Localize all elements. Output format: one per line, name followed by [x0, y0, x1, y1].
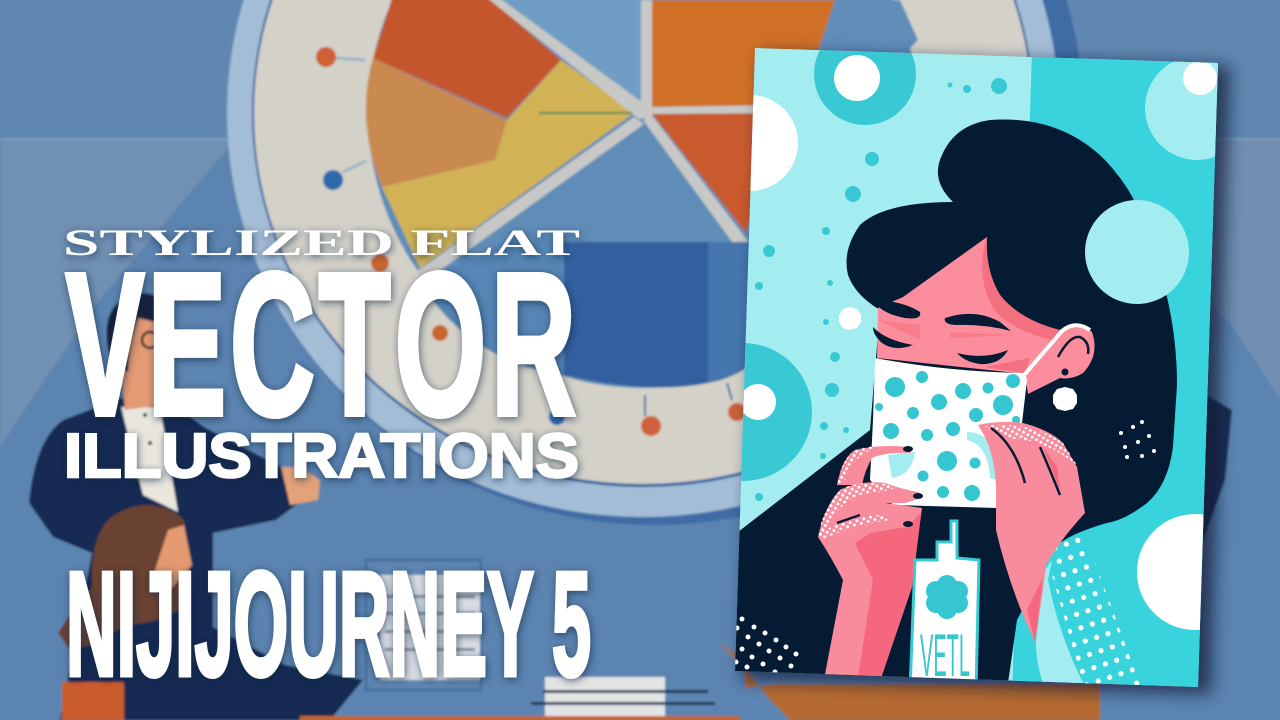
presenter figure — [29, 293, 320, 720]
poster background — [735, 48, 1218, 687]
dotted mask — [870, 358, 1027, 508]
title: vector: VECTOR — [66, 232, 576, 457]
poster: woman with dotted mask: VETL — [920, 622, 970, 689]
poster: woman with dotted mask — [735, 48, 1218, 687]
title: illustrations: ILLUSTRATIONS — [64, 422, 579, 491]
bottle with label — [910, 521, 979, 690]
light circle over hair — [1085, 200, 1189, 304]
left hand — [818, 446, 923, 690]
background circles and dots — [741, 50, 1218, 630]
audience figure — [58, 505, 363, 720]
ear and earring — [1025, 324, 1095, 411]
right hand — [978, 422, 1085, 642]
desk with papers — [300, 560, 740, 720]
chart: large dial pie — [227, 0, 1083, 525]
hair — [730, 120, 1177, 690]
text: NIJIJOURNEY 5 — [66, 542, 591, 707]
title: stylized flat: STYLIZED FLAT — [63, 223, 581, 264]
sleeve and teal area — [1036, 535, 1142, 690]
eyebrows and eyes — [873, 300, 1011, 364]
face — [877, 237, 1060, 374]
table under poster — [718, 642, 1100, 720]
dot patterns — [734, 420, 1156, 674]
poster shadow — [742, 54, 1230, 694]
